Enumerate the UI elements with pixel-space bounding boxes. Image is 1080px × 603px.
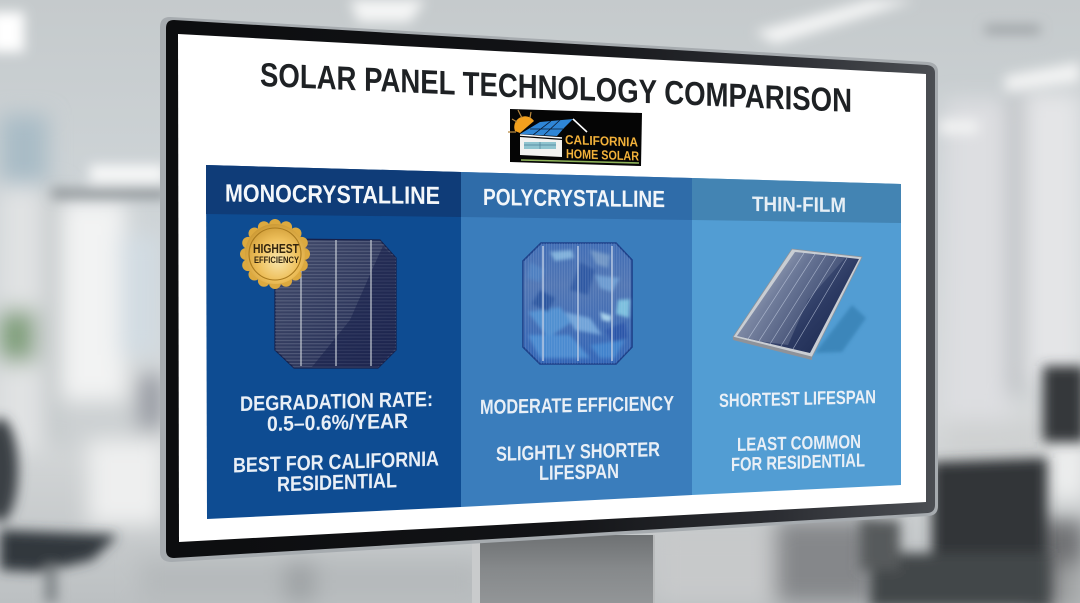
panel: monocrystalline	[206, 165, 461, 519]
text: shortest lifespan: SHORTEST LIFESPAN	[719, 387, 876, 412]
monitor stand	[472, 535, 655, 603]
title: SOLAR PANEL TECHNOLOGY COMPARISON	[260, 57, 852, 120]
text: best for california residential: BEST FOR CALIFORNIA	[233, 448, 439, 477]
text: best for california residential: RESIDENTIAL	[277, 469, 397, 496]
screen	[178, 34, 926, 542]
text: degradation rate: 0.5–0.6%/YEAR	[267, 410, 408, 436]
logo house	[520, 137, 562, 157]
heading: monocrystalline: MONOCRYSTALLINE	[225, 180, 440, 210]
logo: California Home Solar	[508, 109, 642, 166]
logo sun	[508, 110, 534, 133]
text: best for california residential	[233, 448, 439, 496]
badge: highest efficiency: EFFICIENCY	[254, 255, 300, 266]
text: slightly shorter lifespan: LIFESPAN	[539, 460, 619, 485]
text: least common for residential	[731, 432, 865, 476]
text: slightly shorter lifespan: SLIGHTLY SHORTER	[496, 438, 660, 466]
logo wordmark	[565, 132, 639, 164]
text: moderate efficiency: MODERATE EFFICIENCY	[480, 392, 674, 419]
icon: monocrystalline cell	[275, 239, 396, 368]
icon: polycrystalline cell	[523, 243, 632, 364]
text: degradation rate	[240, 388, 433, 436]
text: least common for residential: FOR RESIDENTIAL	[731, 450, 865, 476]
text: degradation rate: DEGRADATION RATE:	[240, 388, 433, 416]
heading: thin-film: THIN-FILM	[752, 193, 846, 217]
text: slightly shorter lifespan	[496, 438, 660, 485]
logo wordmark: HOME SOLAR	[566, 146, 639, 164]
logo ground line	[521, 160, 639, 163]
logo roof	[520, 119, 587, 138]
heading: polycrystalline: POLYCRYSTALLINE	[483, 184, 665, 212]
icon: thin-film panel	[733, 249, 866, 360]
text: least common for residential: LEAST COMMON	[737, 432, 861, 456]
badge: highest efficiency	[240, 219, 310, 289]
comparison table	[206, 165, 901, 519]
logo wordmark: CALIFORNIA	[565, 132, 639, 150]
badge: highest efficiency: HIGHEST	[253, 242, 299, 256]
panel: thin-film	[692, 178, 901, 495]
panel: polycrystalline	[461, 172, 692, 507]
monitor bezel	[160, 17, 938, 562]
